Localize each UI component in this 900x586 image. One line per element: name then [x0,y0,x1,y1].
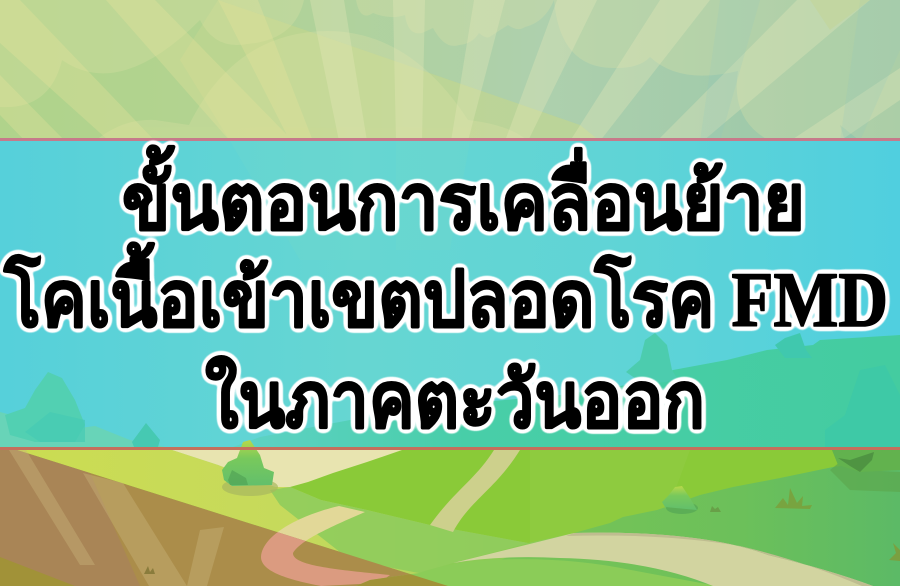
straight path [430,450,520,532]
rays on brown [9,450,224,586]
title line 1: ขั้นตอนการเคลื่อนย้าย [122,145,805,246]
lower front hill [356,559,717,586]
pink border lines [0,138,900,450]
tree: band left [5,372,85,442]
brown slope [0,450,448,586]
winding path over brown [261,532,390,586]
clouds [0,0,900,160]
cream field [172,450,402,487]
tree shadow: far right [830,462,900,492]
bush: cream field [222,440,278,496]
sun rays [0,0,313,141]
light ray on grass [530,450,690,586]
tree: band far right [825,365,900,447]
bush: band small right [775,333,812,358]
panel: teal title band [0,141,900,447]
title line 3: ในภาคตะวันออก [205,355,705,444]
tree dark foliage [838,452,874,472]
band hills [0,335,900,447]
yellow-green slope [17,450,528,586]
lower right hill [500,458,900,586]
background: sky with sun rays and clouds [0,0,900,160]
grass tuft: edge [889,543,900,561]
bush: right small [662,486,698,514]
band rays [230,141,470,260]
bush: band small left [132,423,160,447]
light green slope [270,487,590,573]
grass tuft: right [775,488,812,509]
grass tuft: small [710,506,721,512]
ground [0,440,900,586]
warm sky wedge [0,0,600,141]
grass tuft left [144,566,155,574]
tree: band right centre [626,333,678,385]
title [3,145,888,444]
big road [453,533,873,586]
winding path [261,506,390,586]
big road shadow [566,533,873,586]
